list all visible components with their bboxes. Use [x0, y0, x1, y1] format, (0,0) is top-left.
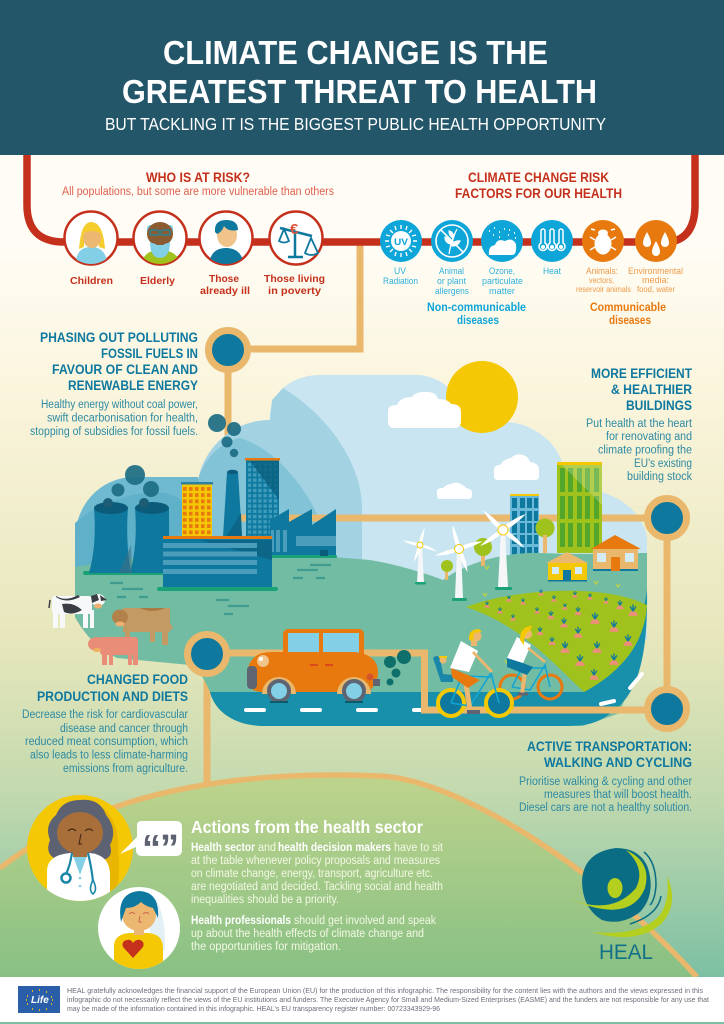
icon: elderly person	[134, 212, 186, 266]
text: actions from the health sector: on climate change, energy, transport, agriculture etc.	[191, 868, 433, 880]
labels: non-communicable risk factors: or plant	[437, 276, 466, 287]
labels: non-communicable risk factors: Ozone,	[489, 266, 515, 277]
icon: scales and euro: €	[290, 221, 299, 238]
text: actions from the health sector	[191, 817, 444, 953]
text: changed food production: emissions from agriculture.	[63, 763, 188, 775]
text: actions from the health sector: up about the health effects of climate change and	[191, 928, 424, 940]
smoke top	[112, 414, 241, 497]
labels: non-communicable risk factors: Heat	[543, 266, 561, 277]
illustration: brown cow	[112, 608, 173, 645]
label: non-communicable diseases: Non-communicable	[427, 302, 526, 314]
heading: climate change risk factors: CLIMATE CHANGE RISK	[468, 170, 609, 185]
node: buildings	[648, 498, 686, 538]
text: changed food production: CHANGED FOOD	[87, 672, 188, 687]
labels: vulnerable groups: already ill	[200, 285, 250, 297]
labels: communicable risk factors: Animals:	[586, 266, 618, 277]
labels: vulnerable groups: Children	[70, 275, 113, 287]
ground	[75, 553, 647, 726]
labels: communicable risk factors: media:	[642, 275, 669, 286]
illustration: male cyclist with child seat	[433, 629, 512, 716]
text: active transportation: measures that will boost health.	[544, 789, 692, 801]
text: actions from the health sector: Actions from the health sector	[191, 817, 423, 837]
labels: non-communicable risk factors: allergens	[435, 286, 469, 297]
text: changed food production: disease and cancer through	[60, 723, 188, 735]
text: actions from the health sector: should get involved and speak	[294, 915, 436, 927]
trees	[441, 538, 492, 580]
text: more efficient buildings: for renovating and	[606, 431, 692, 443]
text: actions from the health sector: and	[258, 842, 276, 854]
illustration: pig	[88, 637, 138, 665]
speech bubble: “”	[142, 828, 179, 870]
header banner: GREATEST THREAT TO HEALTH	[122, 73, 597, 110]
text: active transportation: ACTIVE TRANSPORTATION:	[527, 739, 692, 754]
car exhaust smoke	[384, 650, 411, 686]
text: actions from the health sector: Health professionals	[191, 915, 291, 927]
labels: communicable risk factors: food, water	[637, 285, 675, 294]
road dashes	[246, 674, 642, 710]
connector lines	[207, 244, 667, 786]
text: phasing out fossil fuels: RENEWABLE ENERGY	[68, 378, 198, 393]
text: changed food production: Decrease the risk for cardiovascular	[22, 709, 188, 721]
label: communicable diseases: diseases	[609, 315, 651, 327]
illustration: female cyclist	[500, 626, 562, 699]
text: actions from the health sector: inequalities should be a priority.	[191, 894, 339, 906]
factory	[268, 509, 337, 558]
text: actions from the health sector: the opportunities for mitigation.	[191, 941, 341, 953]
labels: communicable risk factors: Environmental	[628, 266, 683, 277]
icon: scales and euro	[270, 212, 322, 264]
cooling towers	[83, 498, 172, 575]
node: fossil fuels	[208, 330, 248, 370]
labels: communicable risk factors	[576, 266, 683, 294]
icon: insect	[582, 220, 624, 262]
hill connecting arc	[0, 775, 697, 977]
text: active transportation	[519, 739, 692, 814]
labels: communicable risk factors: vectors,	[589, 276, 614, 285]
text: more efficient buildings: Put health at the heart	[586, 418, 693, 430]
text: active transportation: WALKING AND CYCLING	[544, 755, 692, 770]
labels: vulnerable groups	[70, 273, 325, 297]
illustration: health professional	[98, 887, 180, 975]
heading: who is at risk	[62, 170, 334, 198]
text: phasing out fossil fuels: Healthy energy without coal power,	[41, 399, 198, 411]
text: phasing out fossil fuels: FOSSIL FUELS IN	[101, 346, 198, 361]
blue hills	[198, 388, 362, 560]
icon: thermometers	[531, 220, 573, 262]
tall blue tower	[245, 458, 280, 537]
text: more efficient buildings	[586, 366, 693, 483]
footer: HEAL gratefully acknowledges the financial support of the European Union (EU) for the production of this infographic. The responsibility for the content lies with the authors and the views expressed in this	[67, 986, 703, 995]
labels: non-communicable risk factors	[383, 266, 561, 297]
clouds	[388, 392, 539, 499]
crop field	[466, 591, 647, 692]
text: phasing out fossil fuels: stopping of subsidies for fossil fuels.	[30, 426, 198, 438]
labels: vulnerable groups: Elderly	[140, 275, 175, 287]
heading: who is at risk: All populations, but some are more vulnerable than others	[62, 186, 334, 198]
icon: ozone and particulates	[481, 220, 523, 262]
heading: climate change risk factors	[455, 170, 622, 201]
text: changed food production	[22, 672, 188, 775]
wind turbines	[402, 509, 527, 601]
labels: vulnerable groups: Those	[209, 273, 239, 285]
text: actions from the health sector: have to sit	[394, 842, 444, 854]
text: actions from the health sector: Health sector	[191, 842, 255, 854]
icon: person already ill	[200, 212, 252, 264]
text: more efficient buildings: & HEALTHIER	[611, 382, 692, 397]
text: phasing out fossil fuels: PHASING OUT POLLUTING	[40, 330, 198, 345]
text: changed food production: also leads to less climate-harming	[30, 750, 188, 762]
far buildings	[510, 462, 602, 557]
red risk line	[27, 155, 695, 242]
labels: non-communicable risk factors: Animal	[439, 266, 464, 277]
node: transport	[648, 690, 686, 728]
sky	[260, 375, 647, 640]
text: changed food production: PRODUCTION AND DIETS	[37, 689, 188, 704]
icon: UV radiation: UV	[394, 237, 409, 248]
hill	[0, 775, 697, 977]
illustration: white cow	[49, 594, 107, 628]
logo: HEAL: HEAL	[599, 941, 653, 964]
text: active transportation: Prioritise walking & cycling and other	[519, 776, 692, 788]
header banner: BUT TACKLING IT IS THE BIGGEST PUBLIC HEALTH OPPORTUNITY	[105, 114, 606, 134]
icon: child	[64, 212, 118, 268]
main block	[157, 536, 278, 591]
icon: EU LIFE logo	[18, 986, 60, 1013]
text: actions from the health sector: are negotiated and decided. Tackling social and health	[191, 881, 443, 893]
sun	[446, 361, 518, 433]
header banner: CLIMATE CHANGE IS THE	[163, 34, 548, 71]
text: actions from the health sector: at the table whenever policy proposals and measures	[191, 855, 440, 867]
text: actions from the health sector: health decision makers	[278, 842, 391, 854]
labels: vulnerable groups: in poverty	[268, 285, 321, 297]
label: non-communicable diseases: diseases	[457, 315, 499, 327]
heading: who is at risk: WHO IS AT RISK?	[146, 170, 250, 185]
illustration: landscape scene	[75, 361, 650, 726]
carrots	[484, 589, 638, 680]
text: more efficient buildings: EU’s existing	[634, 458, 692, 470]
text: active transportation: Diesel cars are not a healthy solution.	[519, 802, 692, 814]
text: more efficient buildings: climate proofing the	[598, 444, 692, 456]
yellow tower	[181, 482, 213, 538]
heading: climate change risk factors: FACTORS FOR OUR HEALTH	[455, 186, 622, 201]
labels: non-communicable risk factors: Radiation	[383, 276, 418, 287]
text: phasing out fossil fuels: FAVOUR OF CLEAN AND	[52, 362, 198, 377]
labels: non-communicable risk factors: matter	[489, 286, 515, 297]
footer	[0, 977, 724, 1024]
icon: UV radiation	[380, 220, 422, 262]
ground marks	[110, 565, 331, 614]
labels: communicable risk factors: reservoir animals	[576, 285, 631, 294]
text: phasing out fossil fuels: swift decarbonisation for health,	[47, 412, 198, 424]
road	[210, 590, 647, 726]
connector: transport line	[207, 653, 667, 710]
illustration: orange car	[247, 629, 380, 702]
connector: horizontal	[240, 514, 650, 522]
labels: non-communicable risk factors: particulate	[482, 276, 523, 287]
text: more efficient buildings: building stock	[627, 471, 692, 483]
speech bubble	[120, 821, 182, 870]
text: changed food production: reduced meat consumption, which	[25, 736, 188, 748]
logo: HEAL	[570, 848, 672, 964]
text: phasing out fossil fuels	[30, 330, 198, 438]
illustration: doctor	[27, 795, 133, 905]
footer: may be made of the information contained in this infographic. HEAL’s EU transparency register number: 00723343929-96	[67, 1004, 440, 1013]
label: communicable diseases	[590, 302, 666, 327]
label: communicable diseases: Communicable	[590, 302, 666, 314]
text: more efficient buildings: MORE EFFICIENT	[591, 366, 693, 381]
icon: water drops	[635, 220, 677, 262]
labels: vulnerable groups: Those living	[264, 273, 325, 285]
chimney	[223, 470, 242, 537]
icon: EU LIFE logo: Life	[31, 995, 49, 1006]
header banner	[0, 0, 724, 155]
label: non-communicable diseases	[427, 302, 526, 327]
icon: allergens	[431, 220, 473, 262]
node: food	[188, 634, 226, 674]
text: more efficient buildings: BUILDINGS	[626, 398, 692, 413]
small sprouts	[483, 566, 620, 665]
houses	[546, 535, 641, 582]
labels: non-communicable risk factors: UV	[394, 266, 407, 277]
